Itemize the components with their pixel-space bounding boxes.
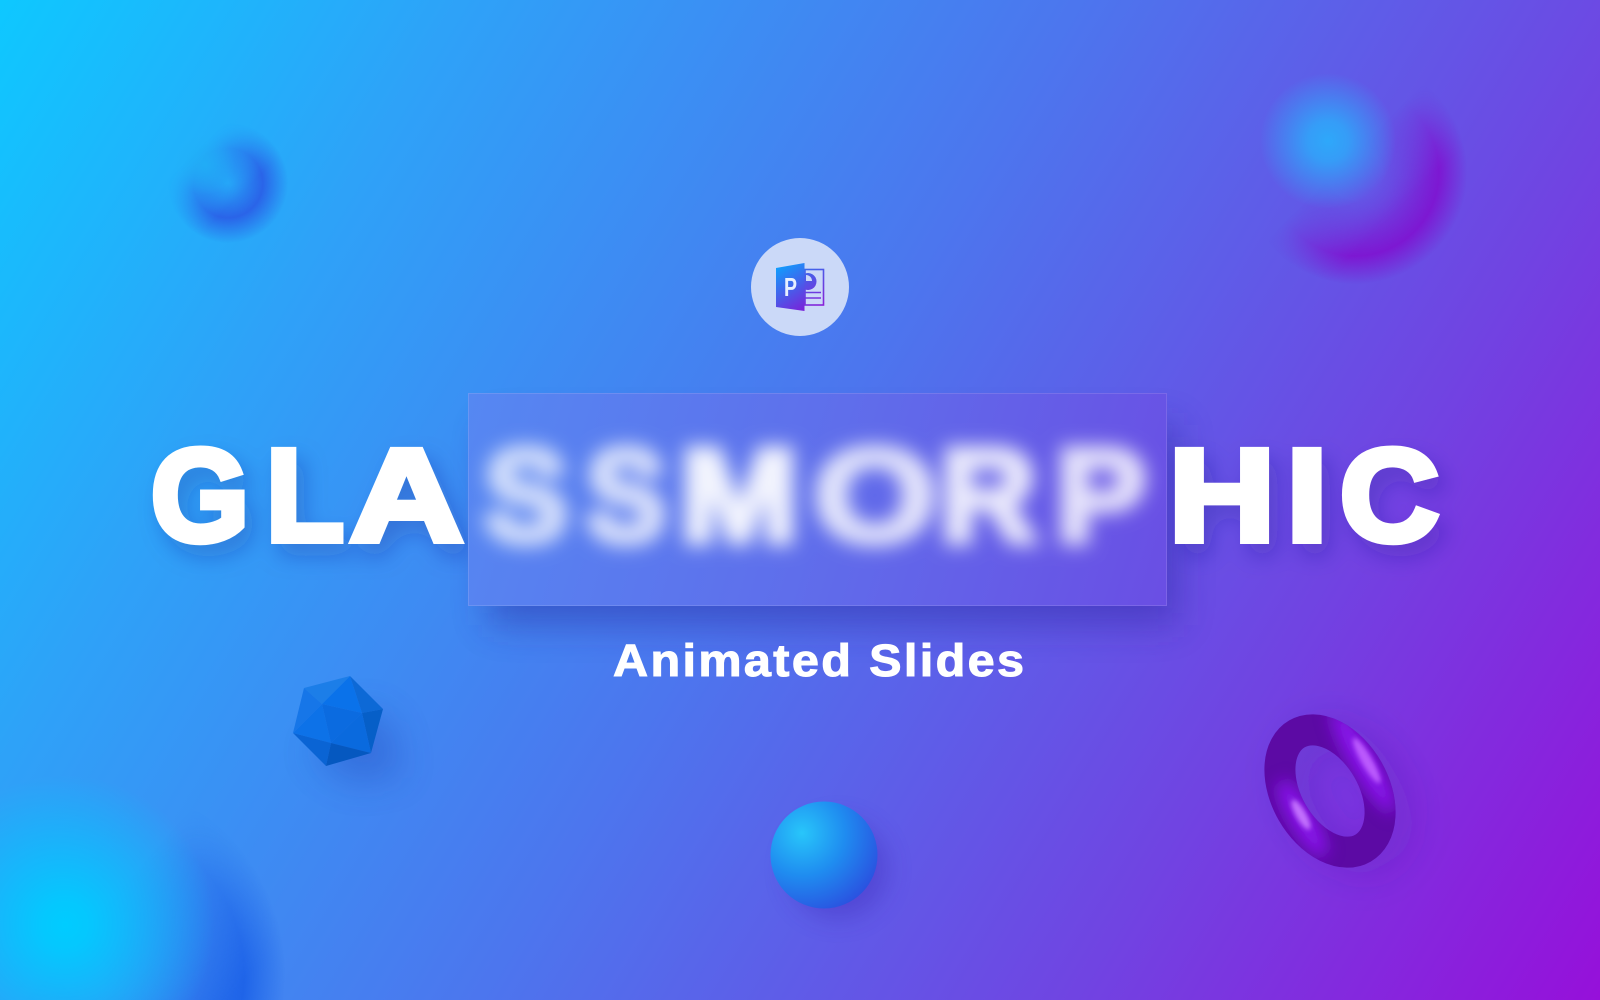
title: blurred letters SSMORP: S bbox=[484, 422, 568, 569]
title: blurred letters SSMORP: O bbox=[814, 422, 936, 569]
title: sharp letters GLA and HIC: C bbox=[1340, 422, 1439, 568]
glass panel bbox=[468, 393, 1167, 606]
title: blurred letters SSMORP: P bbox=[1056, 422, 1146, 569]
title: blurred letters SSMORP: M bbox=[680, 422, 798, 569]
subtitle: Animated Slides bbox=[613, 636, 1024, 686]
title: sharp letters GLA and HIC: I bbox=[1286, 422, 1328, 568]
icon: purple torus bbox=[1264, 714, 1408, 869]
icon: blue sphere bbox=[770, 802, 888, 919]
title: sharp letters GLA and HIC: H bbox=[1169, 422, 1275, 568]
title: blurred letters SSMORP: S bbox=[586, 422, 666, 569]
icon: PowerPoint badge: P bbox=[784, 272, 797, 302]
title: sharp letters GLA and HIC: A bbox=[350, 422, 463, 568]
title: sharp letters GLA and HIC bbox=[151, 422, 1439, 568]
icon: PowerPoint badge bbox=[751, 238, 849, 336]
blurred sphere: top right bbox=[1266, 79, 1463, 280]
title: blurred letters SSMORP: R bbox=[940, 422, 1036, 569]
title: blurred letters SSMORP bbox=[484, 422, 1146, 569]
icon: icosahedron gem bbox=[293, 676, 402, 783]
blurred sphere: bottom left bbox=[0, 798, 276, 1000]
glass panel shadow bbox=[488, 425, 1178, 625]
title: sharp letters GLA and HIC: G bbox=[151, 422, 249, 568]
blurred sphere: top left bbox=[178, 133, 286, 240]
title: sharp letters GLA and HIC: L bbox=[266, 422, 344, 568]
